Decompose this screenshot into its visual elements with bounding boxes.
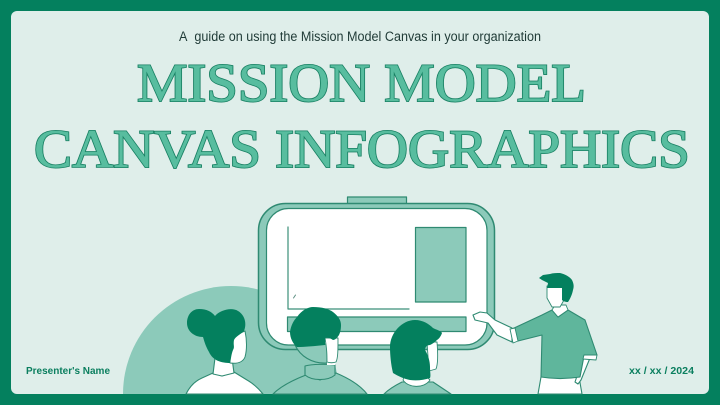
illustration [123,197,597,394]
face [547,286,564,307]
collar [552,305,568,317]
face [228,331,246,363]
hair [390,320,442,380]
side panel [416,228,466,302]
torso [273,373,367,394]
presenter [473,273,597,394]
person 2: short hair [273,307,367,394]
torso [384,382,451,394]
title line 1: MISSION MODEL [137,53,586,113]
lower right arm [575,358,590,384]
face [295,344,327,363]
date: xx / xx / 2024 [629,365,694,377]
cuff left [510,328,518,343]
ear and cheek [325,338,338,363]
board screen [266,208,487,345]
neck [403,375,430,386]
sweater [512,310,597,378]
subtitle: A guide on using the Mission Model Canvas in your organization [179,29,541,44]
board top tab [348,197,406,204]
title [34,53,690,180]
tiny mark [294,295,296,298]
hair [539,273,574,302]
neck [213,358,234,376]
pants [538,377,582,394]
collar [305,364,335,380]
presenter name: Presenter's Name [26,365,110,377]
hair [187,309,245,363]
person 3: bob hair [384,320,451,394]
pointing arm and hand [473,312,512,342]
background circle [123,286,339,394]
face [427,342,438,371]
torso [186,372,263,394]
lower bar [288,317,466,332]
neck front [327,361,336,365]
chart axes [288,227,409,309]
whiteboard [258,197,494,350]
title line 2: CANVAS INFOGRAPHICS [34,120,690,180]
hair [290,307,341,347]
cuff right [583,355,597,360]
person 1: hair buns [186,309,263,394]
title line 1: MISSION MODEL [137,53,586,113]
title line 2: CANVAS INFOGRAPHICS [34,120,690,180]
board frame [258,204,494,350]
